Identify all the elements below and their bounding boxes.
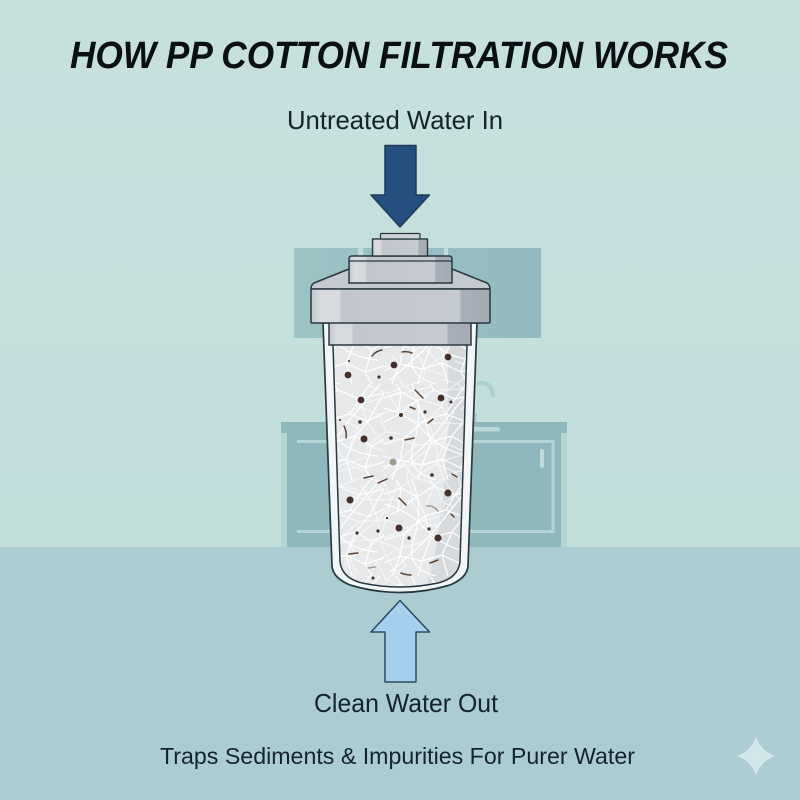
cap band	[311, 289, 490, 323]
label: clean water out: Clean Water Out	[314, 688, 499, 718]
lower collar	[329, 322, 471, 345]
transparent outer shell	[323, 323, 477, 592]
title: HOW PP COTTON FILTRATION WORKS	[70, 35, 728, 77]
wall background	[0, 0, 800, 547]
sediment fibres	[344, 350, 457, 575]
media outline	[333, 345, 467, 587]
inlet nub	[380, 234, 420, 239]
background kitchen counter	[281, 383, 567, 547]
label: untreated water in: Untreated Water In	[287, 105, 503, 135]
background window	[294, 248, 541, 338]
floor	[0, 547, 800, 800]
arrow: water in	[371, 146, 430, 227]
sediment particles	[339, 354, 452, 580]
arrow: water out	[371, 600, 430, 682]
icon: sparkle	[737, 737, 775, 775]
cap upper block	[349, 256, 452, 283]
filter media	[334, 346, 466, 586]
inlet neck	[372, 239, 428, 256]
filter housing	[310, 232, 491, 594]
caption: Traps Sediments & Impurities For Purer Water	[160, 743, 635, 769]
faucet	[477, 383, 493, 397]
cap shoulder	[311, 269, 490, 289]
